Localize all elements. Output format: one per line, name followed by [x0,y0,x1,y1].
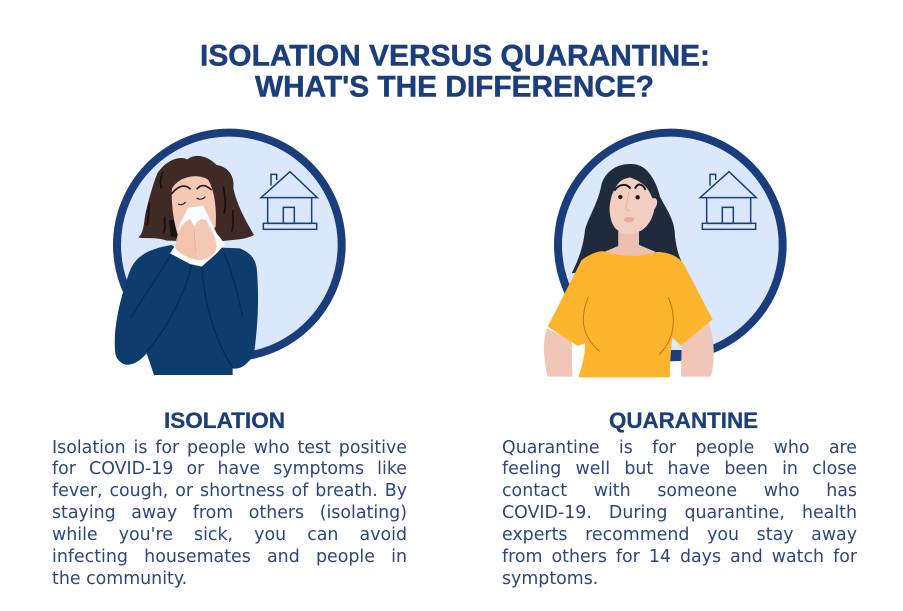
woman figure [115,156,258,375]
text block: isolation [52,438,407,589]
text block: quarantine: Quarantine is for people who are [502,438,857,458]
text block: isolation: for COVID-19 or have symptoms like [52,459,407,479]
icon: house [261,172,317,229]
title [200,40,710,104]
text block: quarantine: feeling well but have been in close [502,459,857,479]
title: ISOLATION VERSUS QUARANTINE: [200,40,710,72]
text block: isolation: Isolation is for people who test positive [52,438,407,458]
illustration: quarantine, woman standing well [544,133,783,377]
text block: isolation: infecting housemates and people in [52,547,407,567]
illustration: isolation, woman sneezing into tissue [115,133,342,375]
heading: quarantine: QUARANTINE [609,408,758,433]
text block: isolation: staying away from others (isolating) [52,503,407,523]
woman figure [544,164,714,377]
text block: quarantine: COVID-19. During quarantine, health [502,503,857,523]
text block: quarantine [502,438,857,589]
title: WHAT'S THE DIFFERENCE? [255,70,654,104]
circle backdrop [117,133,342,357]
icon: house [700,172,756,229]
text block: quarantine: symptoms. [502,569,598,589]
text block: isolation: fever, cough, or shortness of breath. By [52,481,407,501]
text block: quarantine: from others for 14 days and watch for [502,547,857,567]
text block: quarantine: experts recommend you stay away [502,525,857,545]
heading: isolation: ISOLATION [164,408,285,433]
text block: isolation: while you're sick, you can avoid [52,525,407,545]
circle backdrop [558,133,783,357]
text block: quarantine: contact with someone who has [502,481,857,501]
text block: isolation: the community. [52,569,187,589]
